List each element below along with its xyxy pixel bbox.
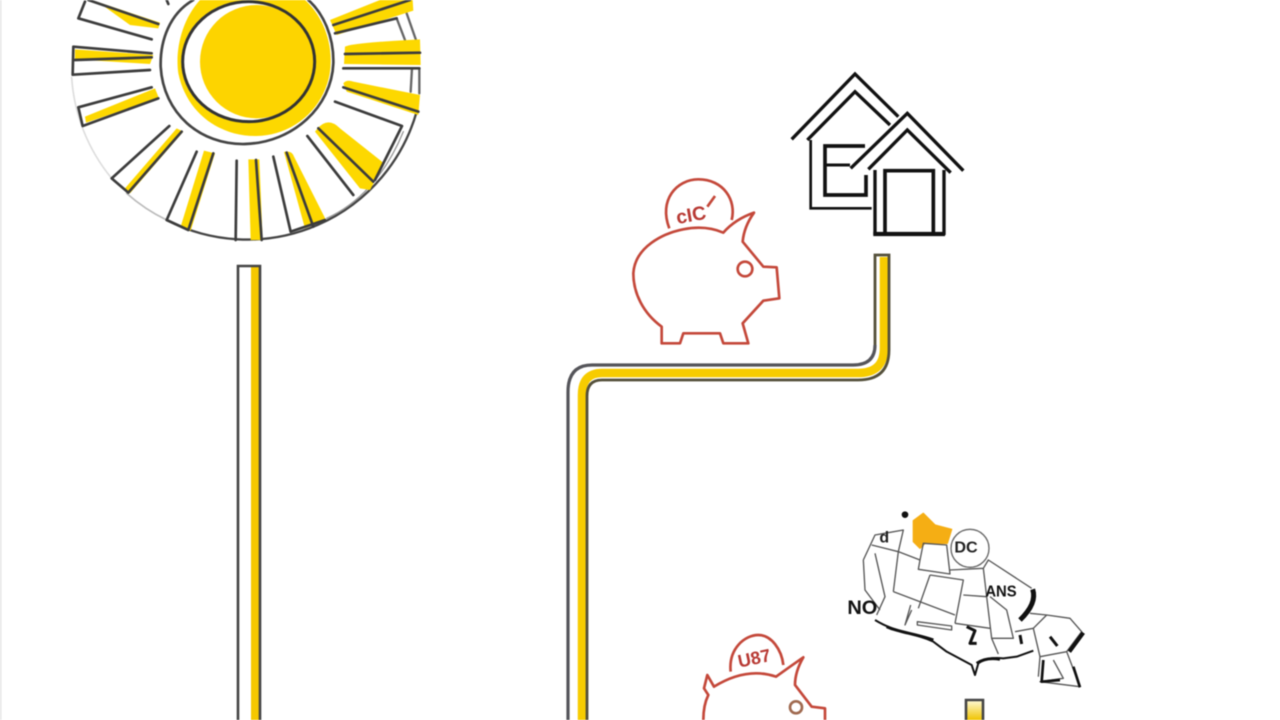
icon: piggy bank lower [703,635,825,720]
icon: houses [792,74,963,235]
icon: piggy bank upper [633,179,779,343]
outer rim [72,77,112,178]
coin label: U87 [736,645,772,672]
pipe: bottom right stub [966,700,983,720]
coin [666,179,733,228]
coin label: cIC [675,203,708,229]
sun disc and rings [161,0,333,144]
map: United States: NO [847,598,877,619]
rays: yellow fills [75,0,421,240]
front house [851,113,963,235]
state labels: DC [954,540,978,557]
pig eye [738,262,752,276]
map: United States [847,512,1083,687]
pig eye [790,701,802,713]
rays: dark lines [73,0,420,240]
coastlines [875,512,1083,687]
highlighted region [913,513,952,548]
pig body [633,213,779,343]
map: United States: d [879,530,889,547]
map: United States: ANS [985,584,1017,601]
pig body [703,657,825,720]
icon: sun [72,0,421,240]
state borders [863,530,903,610]
coin [730,635,783,672]
lake shapes [905,605,952,630]
DC circle [951,529,989,567]
back house [792,74,898,208]
pipe: middle elbow [568,255,889,720]
pipe: left vertical [238,266,260,720]
